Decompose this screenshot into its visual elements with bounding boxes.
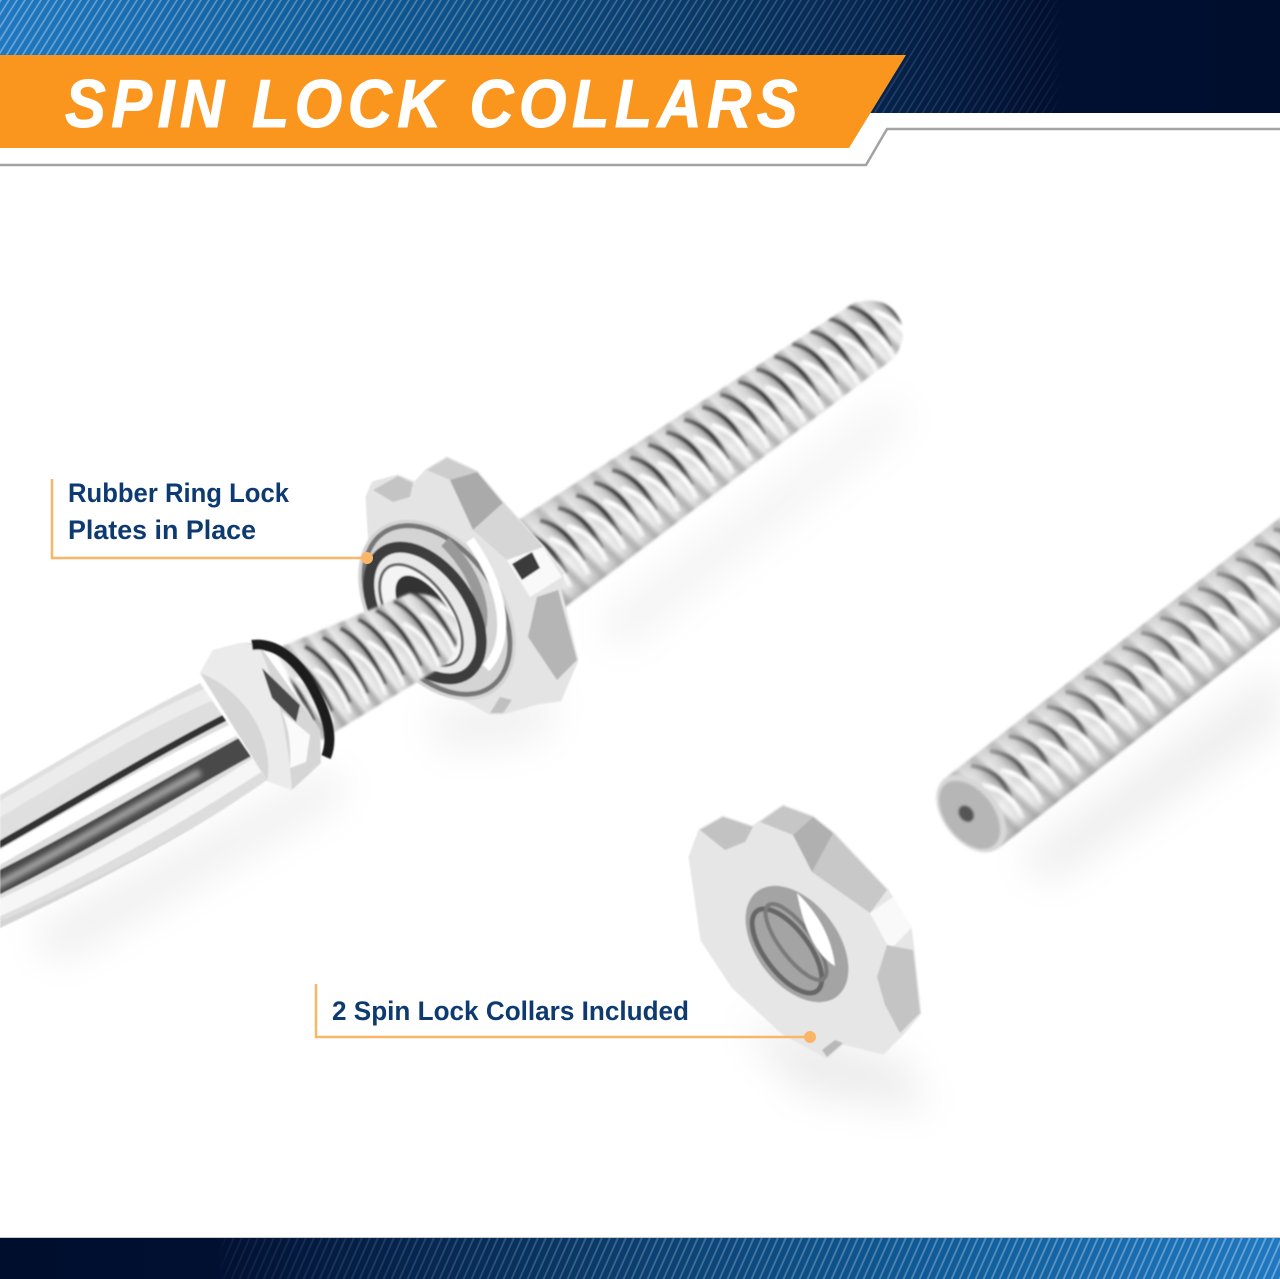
callout: rubber ring xyxy=(52,478,373,564)
product photo xyxy=(0,274,1280,1110)
threaded rod, upper xyxy=(493,274,925,618)
rubber o-ring xyxy=(252,645,329,757)
nut side faces xyxy=(793,817,842,880)
rod end face xyxy=(922,762,1020,866)
nut side faces xyxy=(450,472,503,530)
threaded rod, lower section xyxy=(275,570,477,740)
header outline rule xyxy=(0,129,1280,165)
title banner xyxy=(0,55,906,148)
callout: collars included: 2 Spin Lock Collars Included xyxy=(332,996,689,1026)
leader line xyxy=(52,479,367,558)
callout: rubber ring: Plates in Place xyxy=(68,515,256,545)
title: SPIN LOCK COLLARS xyxy=(65,66,803,142)
washer xyxy=(326,490,548,730)
callout: rubber ring: Rubber Ring Lock xyxy=(68,478,290,508)
leader line xyxy=(316,984,810,1037)
black rubber ring xyxy=(346,527,504,699)
collar with rubber o-ring xyxy=(200,643,329,790)
tube handle xyxy=(0,683,267,930)
collar front face xyxy=(200,643,292,790)
loose spin lock collar xyxy=(690,806,920,1057)
soft floor shadows xyxy=(30,400,1280,1110)
mounted spin lock collar xyxy=(326,458,577,730)
inner ring xyxy=(363,550,479,680)
lobe tops xyxy=(700,817,753,850)
lobe tops xyxy=(373,476,413,502)
header band xyxy=(0,0,1280,113)
footer band xyxy=(0,1237,1280,1279)
threaded rod, right xyxy=(922,489,1280,866)
threaded hole xyxy=(725,867,869,1021)
callout: collars included xyxy=(316,984,816,1043)
